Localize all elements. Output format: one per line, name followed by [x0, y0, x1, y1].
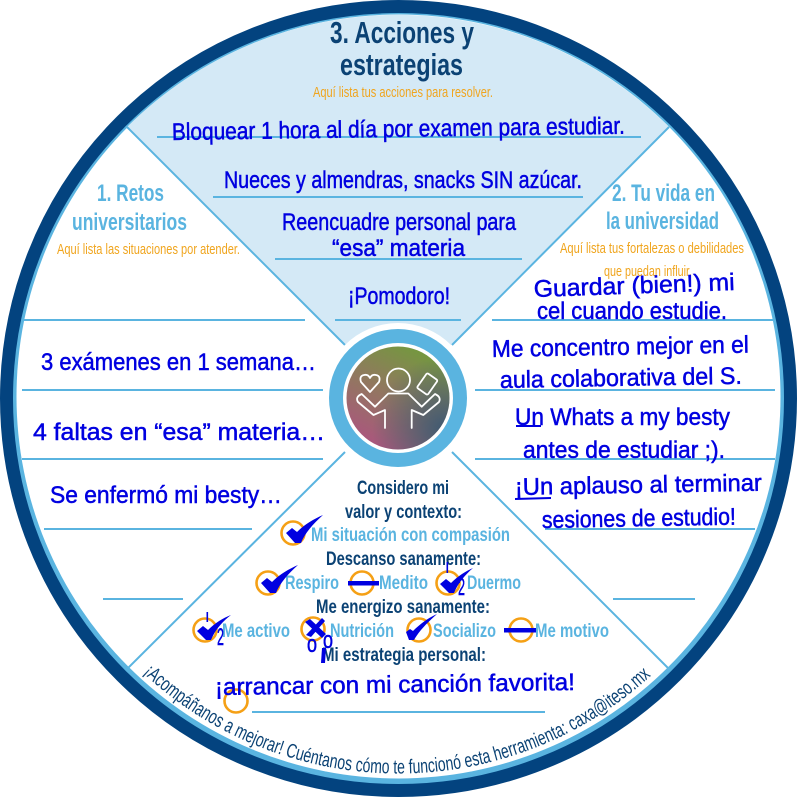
- handwritten strengths: Me concentro mejor en el: [492, 332, 749, 363]
- heading: tu vida en la universidad: [560, 180, 744, 280]
- panel: considero mi valor y contexto: Respiro: [285, 572, 339, 594]
- panel: considero mi valor y contexto: Me energizo sanamente:: [316, 596, 490, 618]
- panel: considero mi valor y contexto: Nutrición: [330, 620, 394, 642]
- panel: considero mi valor y contexto: [222, 477, 609, 666]
- handwritten actions: Nueces y almendras, snacks SIN azúcar.: [224, 167, 582, 194]
- panel: considero mi valor y contexto: Considero mi: [357, 477, 449, 499]
- handwritten challenges: 3 exámenes en 1 semana…: [41, 349, 316, 376]
- handwritten challenges: [33, 349, 325, 509]
- handwritten strengths: antes de estudiar ;).: [523, 437, 725, 464]
- hand marks: checks, dashes and cross: [197, 515, 536, 663]
- center medallion: [323, 323, 473, 473]
- heading: acciones y estrategias: 3. Acciones y: [330, 15, 475, 50]
- handwritten fractions and note: 2: [217, 624, 224, 651]
- heading: acciones y estrategias: [313, 15, 493, 101]
- handwritten challenges: 4 faltas en “esa” materia…: [33, 419, 325, 446]
- checkbox circles: [194, 522, 532, 712]
- heading: tu vida en la universidad: la universidad: [606, 208, 719, 235]
- footer curved text: ¡Acompáñanos a mejorar! Cuéntanos cómo te funcionó esta herramienta: caxa@iteso.mx: [142, 666, 651, 774]
- handwritten strengths: [492, 269, 762, 534]
- panel: considero mi valor y contexto: valor y contexto:: [345, 501, 462, 523]
- handwritten strengths: sesiones de estudio!: [542, 504, 736, 534]
- heading: retos universitarios: 1. Retos: [97, 180, 164, 207]
- heading: acciones y estrategias: Aquí lista tus acciones para resolver.: [313, 84, 493, 101]
- handwritten challenges: Se enfermó mi besty…: [50, 482, 282, 509]
- panel: considero mi valor y contexto: Mi estrategia personal:: [322, 644, 486, 666]
- panel: considero mi valor y contexto: Duermo: [467, 572, 521, 594]
- handwritten actions: ¡Pomodoro!: [348, 283, 450, 310]
- handwritten fractions and note: o: [323, 627, 333, 654]
- heading: tu vida en la universidad: que puedan influir.: [604, 263, 692, 280]
- handwritten personal strategy: ¡arrancar con mi canción favorita!: [215, 669, 575, 701]
- heading: retos universitarios: Aquí lista las situaciones por atender.: [57, 241, 240, 258]
- panel: considero mi valor y contexto: Medito: [379, 572, 428, 594]
- handwritten strengths: ¡Un aplauso al terminar: [515, 470, 762, 501]
- handwritten strengths: cel cuando estudie.: [537, 298, 727, 325]
- handwritten fractions and note: o: [307, 631, 317, 658]
- panel: considero mi valor y contexto: Descanso sanamente:: [326, 548, 481, 570]
- handwritten actions: Reencuadre personal para: [282, 209, 517, 236]
- panel: considero mi valor y contexto: Me motivo: [535, 620, 609, 642]
- handwritten strengths: aula colaborativa del S.: [500, 363, 742, 394]
- heading: acciones y estrategias: estrategias: [340, 47, 463, 82]
- writing lines: [22, 137, 775, 712]
- panel: considero mi valor y contexto: Socializo: [433, 620, 496, 642]
- handwritten fractions and note: [206, 562, 465, 658]
- handwritten fractions and note: 2: [458, 574, 465, 601]
- heading: tu vida en la universidad: 2. Tu vida en: [612, 180, 715, 207]
- handwritten actions: “esa” materia: [332, 235, 466, 262]
- handwritten actions: Bloquear 1 hora al día por examen para estudiar.: [172, 113, 625, 146]
- panel: considero mi valor y contexto: Me activo: [222, 620, 290, 642]
- handwritten actions: [172, 113, 625, 310]
- icon: person with heart and book: [357, 368, 440, 428]
- handwritten strengths: Un Whats a my besty: [515, 404, 730, 431]
- panel: considero mi valor y contexto: Mi situación con compasión: [311, 524, 510, 546]
- heading: retos universitarios: [57, 180, 240, 258]
- heading: retos universitarios: universitarios: [72, 209, 187, 236]
- panel: acciones wedge: [127, 15, 669, 398]
- wheel dividers: [127, 127, 669, 669]
- handwritten strengths: Guardar (bien!) mi: [533, 269, 735, 303]
